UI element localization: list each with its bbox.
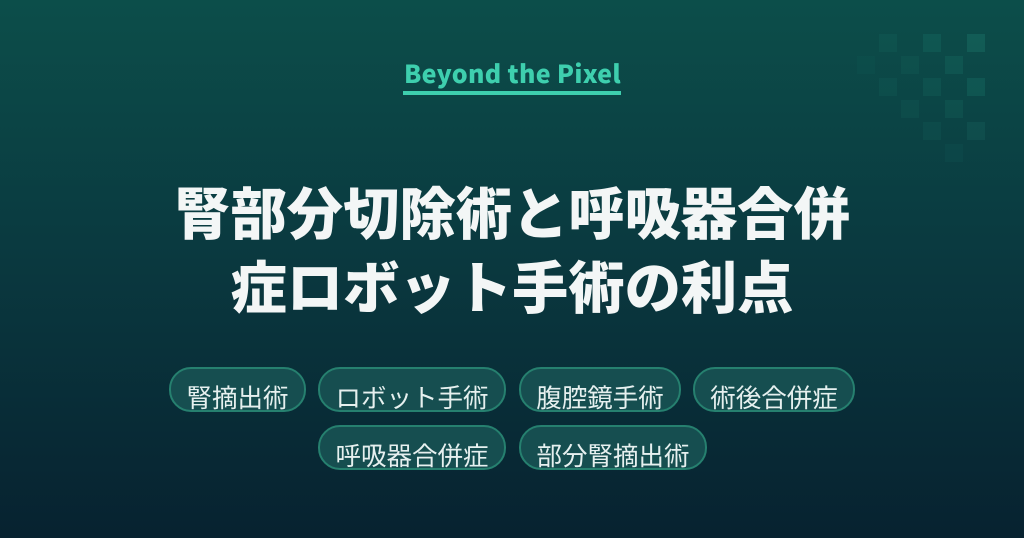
brand underline <box>403 91 621 94</box>
tag: ロボット手術: ロボット手術 <box>335 378 488 415</box>
title: 腎部分切除術と呼吸器合併 <box>174 170 850 251</box>
title <box>174 170 850 325</box>
tag: 部分腎摘出術: 部分腎摘出術 <box>536 436 690 473</box>
tag: ロボット手術 <box>318 367 506 412</box>
tag: 腹腔鏡手術 <box>519 367 681 412</box>
tag: 部分腎摘出術 <box>519 425 707 470</box>
title: 症ロボット手術の利点 <box>231 244 793 325</box>
tag: 呼吸器合併症: 呼吸器合併症 <box>335 436 488 473</box>
tag: 腎摘出術 <box>169 367 306 412</box>
tag: 呼吸器合併症 <box>318 425 506 470</box>
decorative pixel grid icon <box>923 34 985 140</box>
tag: 術後合併症 <box>693 367 855 412</box>
tag: 腹腔鏡手術: 腹腔鏡手術 <box>536 378 664 415</box>
brand label: Beyond the Pixel: Beyond the Pixel <box>404 55 621 91</box>
tag: 腎摘出術: 腎摘出術 <box>186 378 288 415</box>
tag: 術後合併症: 術後合併症 <box>710 378 838 415</box>
